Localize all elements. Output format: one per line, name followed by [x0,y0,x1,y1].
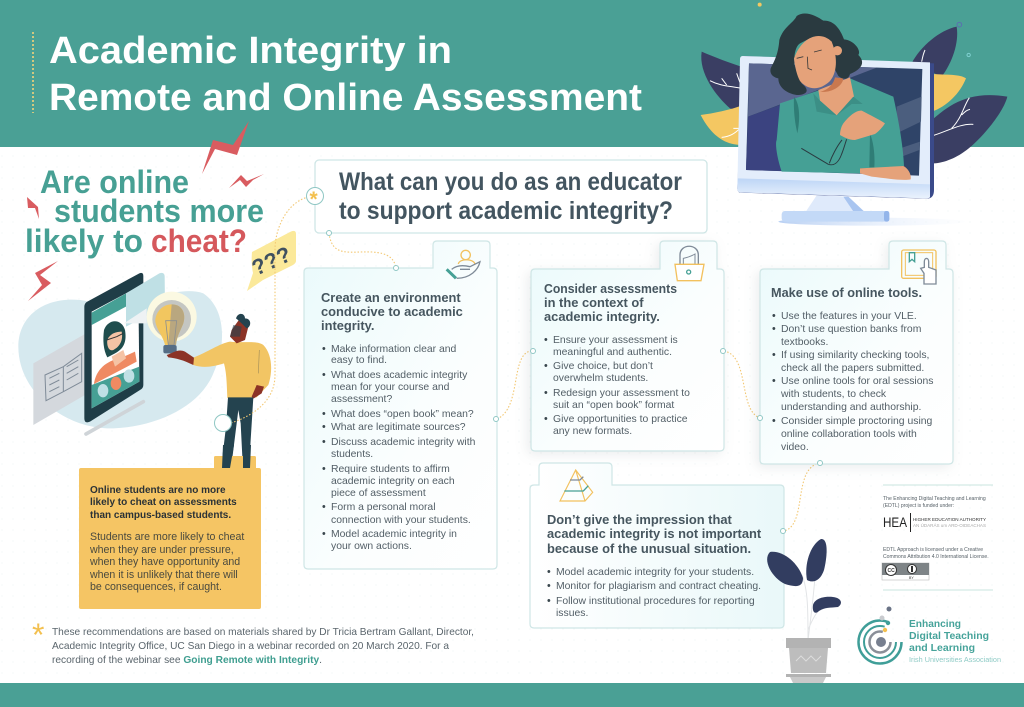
logo: enhancing digital teaching and learning: and Learning [909,642,975,654]
heading: integrity. [321,318,374,333]
body text: Require students to affirm [331,464,450,475]
panel: don't give the impression [530,463,784,628]
connector node [530,348,536,354]
bullets: • [772,310,776,322]
bullets: • [547,595,551,607]
dotted connector: student to question box [231,196,315,423]
licence: CC [888,568,895,574]
heading: Don’t give the impression that [547,512,732,527]
body text: with students, to check [780,389,887,400]
heading: are online students more likely to cheat: cheat? [151,223,247,259]
body text: Model academic integrity for your students. [556,567,754,578]
heading: Make use of online tools. [771,285,922,300]
body text: Form a personal moral [331,502,436,513]
body text: understanding and authorship. [781,402,921,413]
bullets: • [322,528,326,540]
bullets: • [544,387,548,399]
logo: enhancing digital teaching and learning [858,606,1001,664]
callout heading: likely to cheat on assessments [90,497,237,508]
bullets: • [547,580,551,592]
bullets: • [772,323,776,335]
body text: academic integrity on each [331,476,455,487]
icon: asterisk: * [32,617,44,653]
licence: EDTL Approach is licensed under a Creative [883,547,983,553]
body text: issues. [556,608,588,619]
bullets: • [322,343,326,355]
heading: conducive to academic [321,304,463,319]
body text: Give choice, but don’t [553,361,653,372]
callout body: when they have opportunity and [89,556,240,568]
bullets: • [544,334,548,346]
connector node [394,266,398,270]
connector node on student [214,414,232,432]
speech bubble with question marks [247,231,296,291]
connector node [818,460,822,466]
body text: check all the papers submitted. [781,363,924,374]
body text: online collaboration tools with [781,429,917,440]
heading: what can you do: to support academic integrity? [339,197,673,225]
logo: enhancing digital teaching and learning: Enhancing [909,618,961,630]
heading: what can you do: What can you do as an educator [339,168,682,196]
question box with asterisk node [306,160,707,233]
illustration: student with phone and lightbulb [18,273,271,463]
bullets: • [322,421,326,433]
logo: enhancing digital teaching and learning: Irish Universities Association [909,655,1001,664]
body text: Consider simple proctoring using [781,416,933,427]
body text: Redesign your assessment to [553,388,690,399]
bullets: • [322,501,326,513]
bullets: • [322,436,326,448]
body text: video. [781,442,809,453]
funding credits: (EDTL) project is funded under: [883,503,954,509]
footer band [0,683,1024,707]
heading: Consider assessments [544,281,677,296]
callout body: Students are more likely to cheat [90,531,244,543]
licence [882,547,993,590]
bullets: • [322,408,326,420]
footnote [52,627,474,666]
body text: Discuss academic integrity with [331,437,476,448]
body text: any new formats. [553,426,632,437]
heading: are online students more likely to cheat [25,164,264,259]
heading: are online students more likely to cheat: students more [54,193,264,229]
bullets: • [544,360,548,372]
illustration: potted plant [767,539,841,683]
heading: are online students more likely to cheat: likely to [25,223,143,259]
heading: are online students more likely to cheat: Are online [40,164,189,200]
footnote: recording of the webinar see Going Remote with Integrity. [52,655,322,666]
connector node [720,348,726,354]
funding credits: The Enhancing Digital Teaching and Learning [883,496,986,502]
body text: your own actions. [331,541,412,552]
title: Academic Integrity in [49,30,452,72]
heading: academic integrity is not important [547,526,762,541]
body text: If using similarity checking tools, [781,350,929,361]
body text: Model academic integrity in [331,529,457,540]
funding credits [883,485,993,532]
icon: hand holding person [447,250,480,278]
body text: Use online tools for oral sessions [781,376,933,387]
heading: Create an environment [321,290,461,305]
question box with asterisk node: * [310,188,318,211]
footnote: Academic Integrity Office, UC San Diego in a webinar recorded on 20 March 2020. For a [52,641,449,652]
icon: person with laptop [675,246,704,281]
body text: Make information clear and [331,344,457,355]
body text: textbooks. [781,337,828,348]
connector node [758,416,762,420]
icon: pyramid [560,470,593,501]
lightning bolts [27,121,264,301]
funding credits: HIGHER EDUCATION AUTHORITY [913,517,987,523]
heading [544,281,677,324]
footnote: These recommendations are based on materials shared by Dr Tricia Bertram Gallant, Director, [52,627,474,638]
body text: Give opportunities to practice [553,414,688,425]
body text: mean for your course and [331,382,450,393]
panel: create an environment [304,241,497,569]
body text: What are legitimate sources? [331,422,466,433]
logo: enhancing digital teaching and learning: Digital Teaching [909,630,989,642]
body text: assessment? [331,394,392,405]
body text: Ensure your assessment is [553,335,678,346]
bullets: • [772,349,776,361]
body text: students. [331,449,373,460]
body text: Monitor for plagiarism and contract cheating. [556,581,761,592]
callout: key finding [79,456,261,609]
dotted connectors between cards [329,233,820,531]
title: Remote and Online Assessment [49,77,642,119]
heading: what can you do [339,168,682,225]
icon: tablet and pointing hand [902,250,936,284]
callout body: be consequences, if caught. [90,581,222,593]
bullets: • [544,413,548,425]
licence: Commons Attribution 4.0 International License. [883,554,989,560]
heading: academic integrity. [544,309,660,324]
licence: BY [909,576,914,580]
bullets: • [322,463,326,475]
panel: consider assessments [531,241,724,451]
illustration: woman leaning out of monitor [701,3,1007,226]
funding credits: AN ÚDARÁS um ARD-OIDEACHAS [913,522,986,529]
bullets: • [547,566,551,578]
title accent dotted line [32,32,34,113]
body text: easy to find. [331,355,387,366]
heading: because of the unusual situation. [547,541,751,556]
body text: What does academic integrity [331,370,468,381]
callout body: when it is unlikely that there will [89,569,238,581]
bullets: • [772,415,776,427]
body text: connection with your students. [331,515,471,526]
title [49,30,642,119]
connector node [494,416,498,422]
body text: meaningful and authentic. [553,347,672,358]
panel: make use of online tools [760,241,953,464]
connector node [780,528,786,534]
bullets: • [772,375,776,387]
body text: piece of assessment [331,488,426,499]
body text: suit an “open book” format [553,400,674,411]
body text: What does “open book” mean? [331,409,474,420]
heading: in the context of [544,295,644,310]
callout heading: than campus-based students. [90,510,231,521]
callout heading: Online students are no more [90,485,226,496]
callout body: when they are under pressure, [89,544,234,556]
connector node [326,230,332,236]
body text: Don’t use question banks from [781,324,921,335]
bullets: • [322,369,326,381]
body text: Use the features in your VLE. [781,311,917,322]
speech bubble with question marks: ??? [248,241,295,281]
body text: Follow institutional procedures for reporting [556,596,755,607]
man's legs over callout tab [222,445,251,468]
body text: overwhelm students. [553,373,648,384]
header band [0,0,1024,147]
funding credits: HEA [883,514,908,530]
